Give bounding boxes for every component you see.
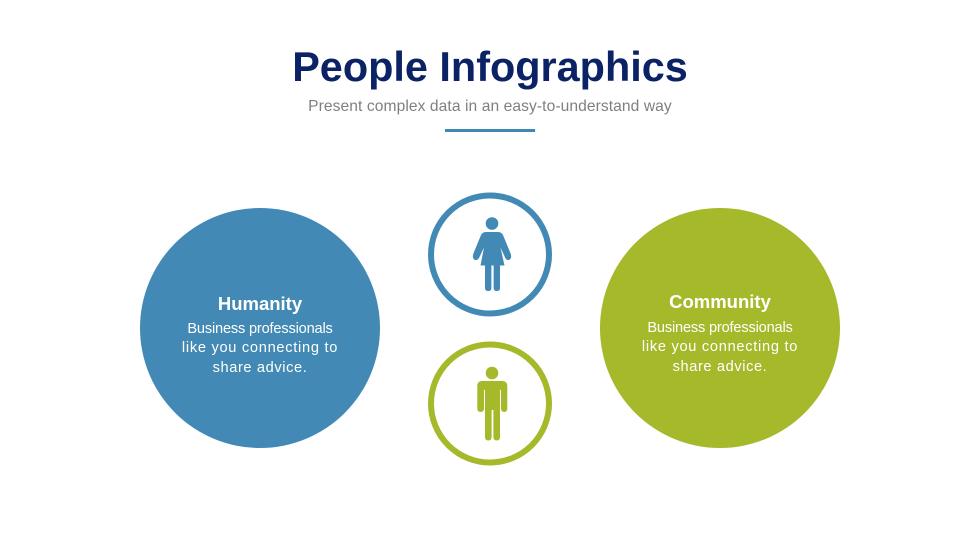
panel: Community circle: [600, 208, 840, 448]
icon: woman in ring: [428, 192, 552, 316]
text block: Humanity description: like you connecting to: [182, 340, 338, 356]
text block: Community description: like you connecting to: [642, 339, 798, 355]
text block: Community description: [642, 320, 798, 375]
text block: Humanity description: Business professionals: [187, 321, 333, 337]
title underline accent: [445, 129, 535, 132]
heading: Humanity: Humanity: [218, 293, 302, 314]
text block: Community description: share advice.: [673, 359, 767, 375]
text block: Community description: Business professionals: [647, 320, 793, 336]
text block: Humanity description: [182, 321, 338, 376]
icon: man in ring: [428, 342, 552, 466]
subtitle: Present complex data in an easy-to-understand way: [308, 98, 672, 115]
title: People Infographics: [292, 44, 688, 90]
panel: Humanity circle: [140, 208, 380, 448]
heading: Community: Community: [669, 291, 771, 312]
text block: Humanity description: share advice.: [213, 360, 307, 376]
